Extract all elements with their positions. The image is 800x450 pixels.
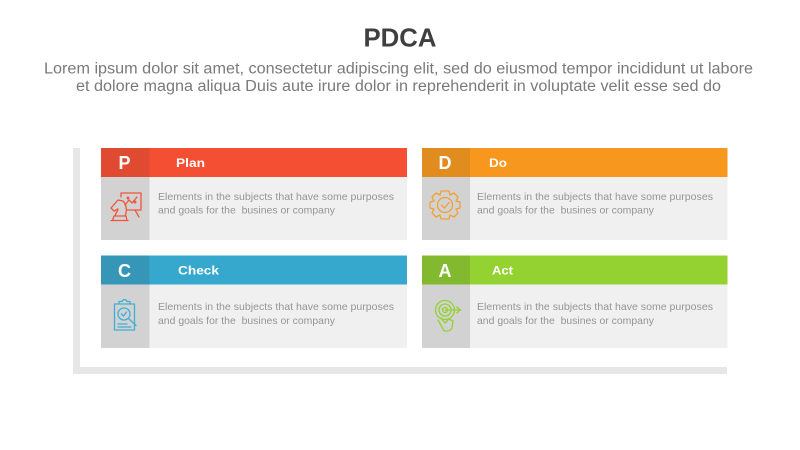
panel: do: Do — [489, 156, 507, 170]
panel: plan: and goals for the busines or company — [158, 204, 336, 216]
panel: check: Check — [178, 264, 219, 278]
panel: act: and goals for the busines or company — [477, 315, 655, 327]
panel: do: Elements in the subjects that have some purposes — [477, 191, 713, 203]
panel: act: Elements in the subjects that have some purposes — [477, 301, 713, 313]
panel: act — [422, 256, 728, 348]
icon: gear with check — [430, 191, 460, 219]
panel: check: and goals for the busines or company — [158, 315, 336, 327]
panel: do: D — [438, 153, 452, 173]
subtitle: Lorem ipsum dolor sit amet, consectetur adipiscing elit, sed do eiusmod tempor incididunt ut labore — [44, 60, 753, 78]
title: PDCA — [364, 22, 437, 52]
icon: clipboard with magnifier — [114, 300, 136, 330]
icon: target with hand and arrow — [436, 300, 461, 331]
subtitle: et dolore magna aliqua Duis aute irure dolor in reprehenderit in voluptate velit esse sed do — [76, 78, 721, 95]
icon: chess knight and chart board — [111, 193, 141, 220]
panel: plan — [101, 148, 407, 240]
subtitle — [44, 60, 753, 95]
panel: do: and goals for the busines or company — [477, 204, 655, 216]
panel: plan: P — [118, 153, 131, 173]
panel: plan: Plan — [176, 156, 205, 170]
L-shaped frame — [73, 148, 727, 374]
panel: check: C — [118, 261, 131, 281]
panel: act: Act — [492, 264, 513, 278]
panel: act: A — [438, 261, 452, 281]
panel: plan: Elements in the subjects that have some purposes — [158, 191, 394, 203]
panel: check: Elements in the subjects that have some purposes — [158, 301, 394, 313]
panel: check — [101, 256, 407, 348]
panel: do — [422, 148, 728, 240]
